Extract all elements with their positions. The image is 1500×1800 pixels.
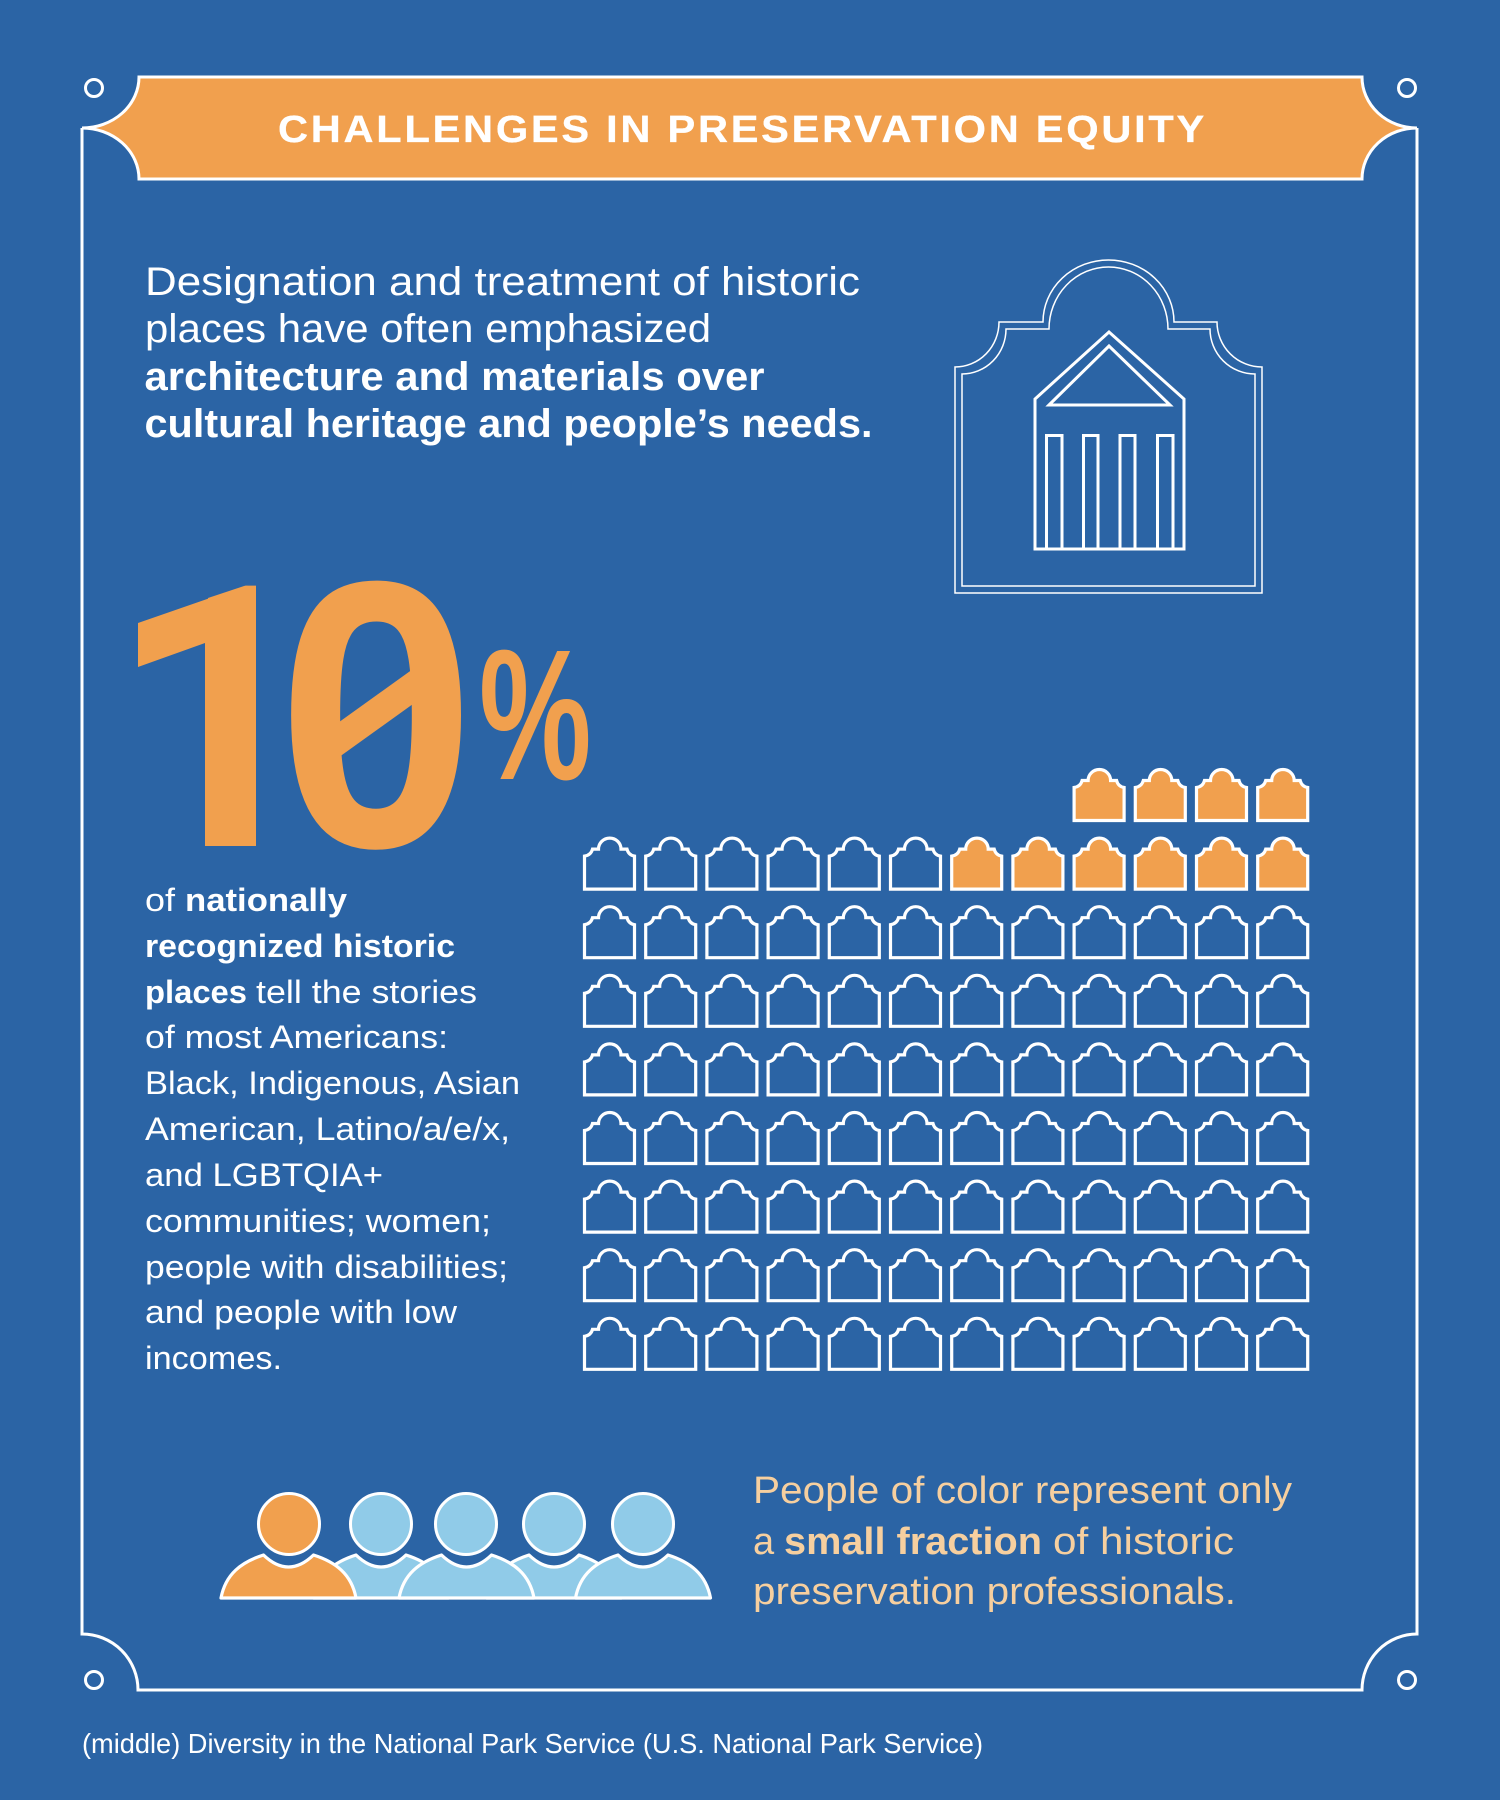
frame: border outline with corner notches bbox=[82, 128, 1417, 1690]
big statistic: 10% bbox=[138, 580, 588, 850]
statistic description: communities; women; bbox=[145, 1203, 491, 1239]
icon: group of people bbox=[221, 1494, 710, 1598]
intro text block bbox=[144, 260, 872, 446]
title banner bbox=[82, 77, 1417, 179]
statistic description: American, Latino/a/e/x, bbox=[145, 1111, 510, 1147]
intro text block: Designation and treatment of historic bbox=[145, 260, 860, 304]
professionals text: small fraction bbox=[784, 1521, 1042, 1563]
temple bbox=[1035, 332, 1184, 549]
pictogram: 100 building icons, 10 highlighted bbox=[584, 770, 1308, 1369]
top row: 4 highlighted bbox=[1074, 770, 1308, 820]
professionals text: preservation professionals. bbox=[753, 1571, 1236, 1613]
second row: 6 outline, 6 highlighted bbox=[584, 838, 1308, 889]
building inner outline bbox=[962, 267, 1255, 586]
professionals text: People of color represent only bbox=[753, 1470, 1292, 1512]
orange person bbox=[221, 1494, 356, 1598]
intro text block: cultural heritage and people’s needs. bbox=[144, 402, 872, 446]
source caption: (middle) Diversity in the National Park Service (U.S. National Park Service) bbox=[82, 1728, 983, 1759]
statistic description: of most Americans: bbox=[145, 1019, 448, 1055]
percent sign: % bbox=[479, 611, 591, 819]
statistic description: and LGBTQIA+ bbox=[145, 1157, 383, 1193]
statistic description: incomes. bbox=[145, 1340, 282, 1376]
icon: corner circles bbox=[86, 80, 1416, 1688]
statistic description: recognized historic bbox=[145, 928, 455, 964]
statistic description: nationally bbox=[185, 882, 347, 918]
intro text block: places have often emphasized bbox=[145, 307, 711, 351]
numeral 0 with slash: 0 bbox=[277, 503, 476, 927]
statistic description: of bbox=[145, 882, 175, 918]
professionals text: a bbox=[753, 1521, 775, 1563]
remaining outline rows bbox=[584, 907, 1308, 1369]
statistic description: and people with low bbox=[145, 1294, 458, 1330]
numeral 1: 1 bbox=[125, 503, 336, 928]
building outer outline bbox=[955, 260, 1262, 593]
intro text block: architecture and materials over bbox=[144, 355, 765, 399]
statistic description: tell the stories bbox=[256, 974, 477, 1010]
statistic description bbox=[145, 882, 520, 1376]
statistic description: people with disabilities; bbox=[145, 1249, 508, 1285]
back people bbox=[314, 1494, 622, 1598]
numeral 1 bbox=[138, 584, 256, 846]
professionals text bbox=[753, 1470, 1292, 1613]
icon: historic building bbox=[955, 260, 1262, 593]
statistic description: Black, Indigenous, Asian bbox=[145, 1065, 520, 1101]
banner shape bbox=[82, 77, 1417, 179]
front people bbox=[399, 1494, 710, 1598]
title: CHALLENGES IN PRESERVATION EQUITY bbox=[278, 109, 1207, 151]
statistic description: places bbox=[145, 974, 247, 1010]
professionals text: of historic bbox=[1053, 1521, 1234, 1563]
